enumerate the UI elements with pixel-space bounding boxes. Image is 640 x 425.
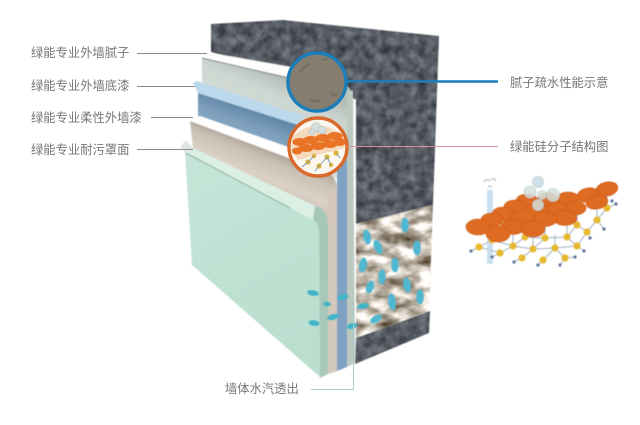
bonds <box>302 153 340 171</box>
layer: green finish front <box>185 152 320 377</box>
layer: flexible paint white strip <box>190 116 325 174</box>
label: vapour escaping: 墙体水汽透出 <box>225 381 299 396</box>
bonds <box>471 195 616 265</box>
vapour wisps <box>484 179 496 187</box>
callout: putty hydrophobic circle <box>288 53 346 111</box>
callout line: vapour <box>311 300 354 390</box>
layer: blue primer <box>198 93 300 160</box>
pale blue tube <box>487 190 493 264</box>
yellow atoms <box>475 204 611 264</box>
orange molecules <box>466 180 619 242</box>
blue light top strip <box>193 81 304 125</box>
callout: silicon molecule circle <box>289 118 347 176</box>
wall base <box>355 311 430 364</box>
water drops in aggregate <box>358 218 424 325</box>
coating layers <box>180 52 355 378</box>
wall block <box>211 20 439 364</box>
putty white top strip <box>202 52 292 77</box>
molecule diagram <box>466 176 619 267</box>
water vapour escaping <box>307 289 369 330</box>
green side strip <box>313 206 328 378</box>
layer: putty <box>202 53 355 369</box>
left labels <box>31 45 142 157</box>
wall top and front face <box>211 20 439 100</box>
label: putty: 绿能专业外墙腻子 <box>31 45 129 60</box>
beige side strip <box>328 186 337 374</box>
green tab <box>180 140 193 152</box>
label: flexible paint: 绿能专业柔性外墙漆 <box>31 110 142 125</box>
label: topcoat: 绿能专业耐污罩面 <box>31 142 129 157</box>
green shadow line <box>186 153 290 208</box>
label: putty hydrophobic: 腻子疏水性能示意 <box>510 75 608 90</box>
callout line: putty <box>346 80 498 83</box>
layer: green finish top strip <box>185 148 315 221</box>
yellow atoms <box>305 150 339 169</box>
aggregate section <box>356 205 433 338</box>
small atoms <box>469 199 618 267</box>
layer: beige <box>190 121 337 374</box>
bubbles <box>309 122 326 135</box>
putty shadow line <box>202 58 288 78</box>
blue side strip <box>337 158 347 371</box>
label lines <box>137 54 207 150</box>
orange band <box>291 126 346 160</box>
putty side strip <box>347 90 355 367</box>
label: molecule structure: 绿能硅分子结构图 <box>510 139 608 154</box>
callout line: molecule <box>347 146 498 148</box>
water bubbles <box>524 176 560 210</box>
label: primer: 绿能专业外墙底漆 <box>31 78 129 93</box>
wall side face <box>356 36 439 224</box>
